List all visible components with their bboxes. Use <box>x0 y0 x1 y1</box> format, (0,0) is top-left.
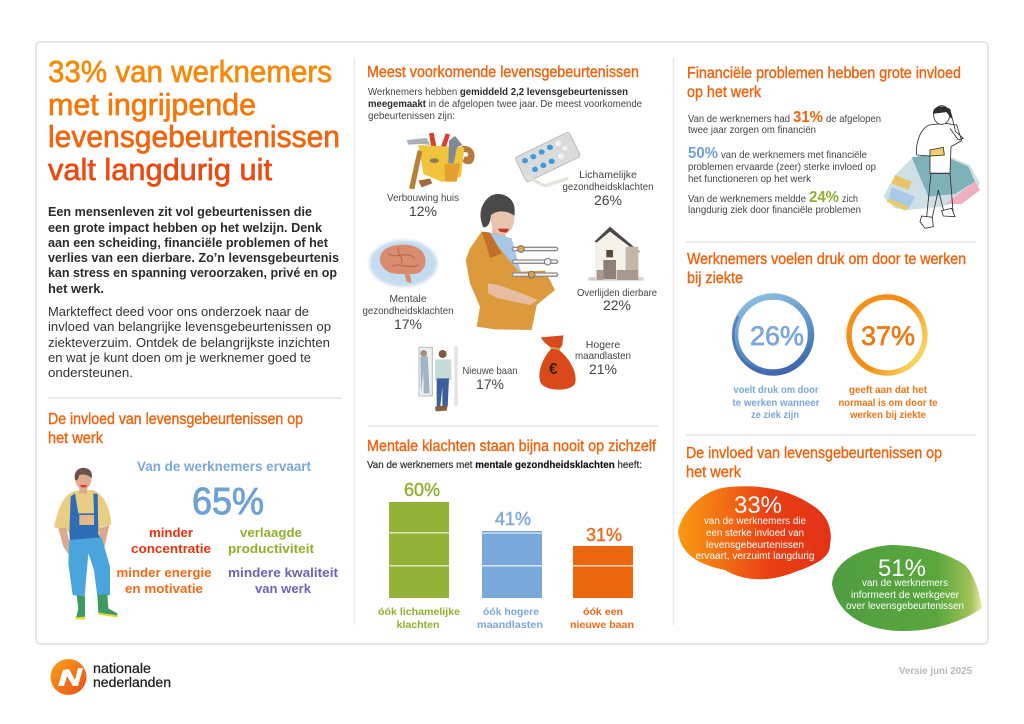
bar: 31% nieuwe baan <box>570 525 634 631</box>
stat: 24% langdurig ziek <box>688 189 861 216</box>
panel: left column <box>48 54 342 619</box>
bar: 31% nieuwe baan: 31% <box>586 525 622 545</box>
heading: invloed op het werk: De invloed van levensgebeurtenissen op <box>48 411 303 428</box>
heading: mentale klachten: Mentale klachten staan bijna nooit op zichzelf <box>367 438 657 455</box>
heading: invloed op het werk rechts: De invloed van levensgebeurtenissen op <box>686 445 942 462</box>
heading: druk om door te werken: Werknemers voelen druk om door te werken <box>687 251 966 268</box>
bar: 31% nieuwe baan: nieuwe baan <box>570 619 634 631</box>
label: lichamelijke gezondheidsklachten: Lichamelijke <box>579 169 637 181</box>
stat: 65% experiences: 65% <box>192 481 264 523</box>
item: minder concentratie <box>131 525 211 556</box>
intro text bold: verlies van een dierbare. Zo’n levensgebeurtenis <box>48 250 339 265</box>
bar: 41% hogere maandlasten <box>477 509 543 631</box>
bar: 60% lichamelijke klachten <box>378 480 460 631</box>
callout: 51% green blob: van de werknemers <box>862 578 948 589</box>
intro text: gebeurtenissen zijn: <box>368 110 455 122</box>
chart: ring 37% <box>838 297 938 421</box>
illustration: worried man with money <box>883 106 980 228</box>
logo: nationale nederlanden: nationale <box>93 661 151 676</box>
heading: invloed op het werk rechts <box>686 445 942 481</box>
stat: 31% zorgen om financiën: twee jaar zorgen om financiën <box>688 124 816 136</box>
stat: 65% experiences <box>137 459 311 523</box>
item: verlaagde productiviteit: productiviteit <box>228 541 315 556</box>
heading: financiële problemen: Financiële problemen hebben grote invloed <box>687 65 961 82</box>
callout: 51% green blob: over levensgebeurtenissen <box>846 601 964 612</box>
version note: Versie juni 2025 <box>899 666 972 677</box>
callout: 51% green blob: 51% <box>878 555 926 582</box>
item: mindere kwaliteit van werk: van werk <box>255 581 312 596</box>
label: hogere maandlasten <box>575 339 631 377</box>
logo: nationale nederlanden <box>50 659 171 695</box>
intro text regular: ondersteunen. <box>48 365 133 380</box>
stat: 24% langdurig ziek: Van de werknemers meldde <box>688 193 806 205</box>
illustration: worker in overalls <box>54 468 118 619</box>
stat: 24% langdurig ziek: langdurig ziek door financiële problemen <box>688 204 861 216</box>
intro text bold: een grote impact hebben op het welzijn. Denk <box>48 220 323 235</box>
callout: 33% red blob <box>678 486 831 579</box>
chart: ring 37%: normaal is om door te <box>838 397 938 409</box>
stat: 50% sterke invloed: 50% <box>688 145 718 162</box>
stat: 50% sterke invloed: van de werknemers met financiële <box>721 149 867 161</box>
chart: ring 37%: 37% <box>861 321 915 351</box>
icon: tool belt <box>407 133 475 189</box>
callout: 33% red blob: een sterke invloed van <box>706 528 804 539</box>
intro text <box>368 86 642 122</box>
main panel frame <box>36 42 988 644</box>
heading: invloed op het werk: het werk <box>48 430 103 447</box>
label: hogere maandlasten: maandlasten <box>575 350 631 362</box>
stat: 50% sterke invloed: problemen ervaarde (zeer) sterke invloed op <box>688 161 876 173</box>
callout: 33% red blob: van de werknemers die <box>704 516 806 527</box>
bar: 60% lichamelijke klachten: óók lichamelijke <box>378 606 460 618</box>
heading: invloed op het werk rechts: het werk <box>686 464 741 481</box>
bar: 41% hogere maandlasten: maandlasten <box>477 619 543 631</box>
stat: 24% langdurig ziek: 24% <box>809 189 839 206</box>
label: verbouwing huis <box>387 192 459 219</box>
illustrations <box>369 132 643 411</box>
label: nieuwe baan: 17% <box>476 376 504 392</box>
bar: 60% lichamelijke klachten: 60% <box>404 480 440 500</box>
heading: druk om door te werken: bij ziekte <box>687 270 743 287</box>
label: mentale gezondheidsklachten: gezondheidsklachten <box>362 305 454 317</box>
stat: 31% zorgen om financiën: de afgelopen <box>826 113 881 125</box>
item: minder energie en motivatie: en motivatie <box>125 581 203 596</box>
logo: nationale nederlanden: nederlanden <box>93 675 171 690</box>
label: mentale gezondheidsklachten: Mentale <box>389 293 427 305</box>
heading: meest voorkomende: Meest voorkomende levensgebeurtenissen <box>367 64 639 81</box>
title: 33% van werknemers <box>48 54 332 89</box>
stat: 65% experiences: Van de werknemers ervaart <box>137 459 311 474</box>
chart: ring 26%: ze ziek zijn <box>751 409 799 421</box>
intro text bold: het werk. <box>48 281 104 296</box>
intro text regular: invloed van belangrijke levensgebeurtenissen op <box>48 319 331 334</box>
label: mentale gezondheidsklachten <box>362 293 454 332</box>
chart: ring 26%: voelt druk om door <box>734 384 818 396</box>
intro text bold: aan een scheiding, financiële problemen of het <box>48 235 329 250</box>
heading: invloed op het werk <box>48 411 303 447</box>
icon: money bag: € <box>549 361 558 378</box>
panel: middle column <box>362 64 658 631</box>
callout: 33% red blob: ervaart, verzuimt langdurig <box>696 551 815 562</box>
intro text: Werknemers hebben gemiddeld 2,2 levensgebeurtenissen <box>368 86 628 98</box>
callout: 51% green blob <box>832 545 982 631</box>
label: lichamelijke gezondheidsklachten: gezondheidsklachten <box>562 181 654 193</box>
intro text bold <box>48 204 339 296</box>
label: overlijden dierbare: Overlijden dierbare <box>577 287 657 299</box>
panel: right column <box>678 65 982 631</box>
item: verlaagde productiviteit: verlaagde <box>240 525 302 540</box>
bar: 41% hogere maandlasten: 41% <box>495 509 531 529</box>
title <box>48 54 340 187</box>
label: overlijden dierbare: 22% <box>603 297 631 313</box>
intro text bold: Een mensenleven zit vol gebeurtenissen die <box>48 204 312 219</box>
chart: ring 37%: geeft aan dat het <box>849 384 927 396</box>
stat: 50% sterke invloed: het functioneren op het werk <box>688 173 812 185</box>
label: mentale gezondheidsklachten: 17% <box>394 316 422 332</box>
item: verlaagde productiviteit <box>228 525 315 556</box>
bar chart <box>378 480 634 631</box>
chart: ring 26% <box>732 296 820 421</box>
heading: druk om door te werken <box>687 251 966 287</box>
label: lichamelijke gezondheidsklachten: 26% <box>594 192 622 208</box>
stat: 31% zorgen om financiën: 31% <box>793 109 823 126</box>
label: hogere maandlasten: 21% <box>589 361 617 377</box>
stat: 31% zorgen om financiën: Van de werknemers had <box>688 113 790 125</box>
item: mindere kwaliteit van werk: mindere kwaliteit <box>228 565 339 580</box>
heading: financiële problemen <box>687 65 961 101</box>
chart subtitle: Van de werknemers met mentale gezondheidsklachten heeft: <box>367 459 642 471</box>
label: lichamelijke gezondheidsklachten <box>562 169 654 208</box>
label: hogere maandlasten: Hogere <box>586 339 620 351</box>
callout: 51% green blob: informeert de werkgever <box>851 590 960 601</box>
icon: money bag <box>539 335 576 390</box>
icon: brain <box>369 240 437 287</box>
heading: financiële problemen: op het werk <box>687 84 761 101</box>
title: met ingrijpende <box>48 87 256 122</box>
title: valt langdurig uit <box>48 152 272 187</box>
callout: 33% red blob: 33% <box>734 492 782 519</box>
item: minder energie en motivatie: minder energie <box>116 565 212 580</box>
item: minder energie en motivatie <box>116 565 212 596</box>
item: minder concentratie: minder <box>149 525 193 540</box>
label: verbouwing huis: Verbouwing huis <box>387 192 459 204</box>
label: overlijden dierbare <box>577 287 657 313</box>
label: verbouwing huis: 12% <box>409 203 437 219</box>
title: levensgebeurtenissen <box>48 119 340 154</box>
stat: 50% sterke invloed <box>688 145 876 185</box>
item: minder concentratie: concentratie <box>131 541 211 556</box>
item: mindere kwaliteit van werk <box>228 565 339 596</box>
icon: blister pack <box>515 132 581 186</box>
intro text regular: en wat je kunt doen om je werknemer goed te <box>48 350 311 365</box>
stat: 24% langdurig ziek: zich <box>842 193 858 205</box>
icon: woman with sliders <box>466 194 558 330</box>
intro text regular: Markteffect deed voor ons onderzoek naar de <box>48 304 309 319</box>
intro text regular <box>48 304 331 380</box>
chart: ring 37%: werken bij ziekte <box>849 409 926 421</box>
intro text: meegemaakt in de afgelopen twee jaar. De meest voorkomende <box>368 98 642 110</box>
callout: 33% red blob: levensgebeurtenissen <box>706 540 804 551</box>
intro text bold: kan stress en spanning veroorzaken, privé en op <box>48 265 337 280</box>
icon: house <box>588 227 643 281</box>
label: nieuwe baan: Nieuwe baan <box>462 365 518 377</box>
icon: mirror and man <box>419 346 458 411</box>
chart: ring 26%: 26% <box>750 321 804 351</box>
stat: 31% zorgen om financiën <box>688 109 881 136</box>
bar: 31% nieuwe baan: óók een <box>583 606 623 618</box>
chart: ring 26%: te werken wanneer <box>732 397 820 409</box>
intro text regular: ziekteverzuim. Ontdek de belangrijkste inzichten <box>48 335 330 350</box>
bar: 60% lichamelijke klachten: klachten <box>396 619 440 631</box>
label: nieuwe baan <box>462 365 518 392</box>
bar: 41% hogere maandlasten: óók hogere <box>483 606 539 618</box>
